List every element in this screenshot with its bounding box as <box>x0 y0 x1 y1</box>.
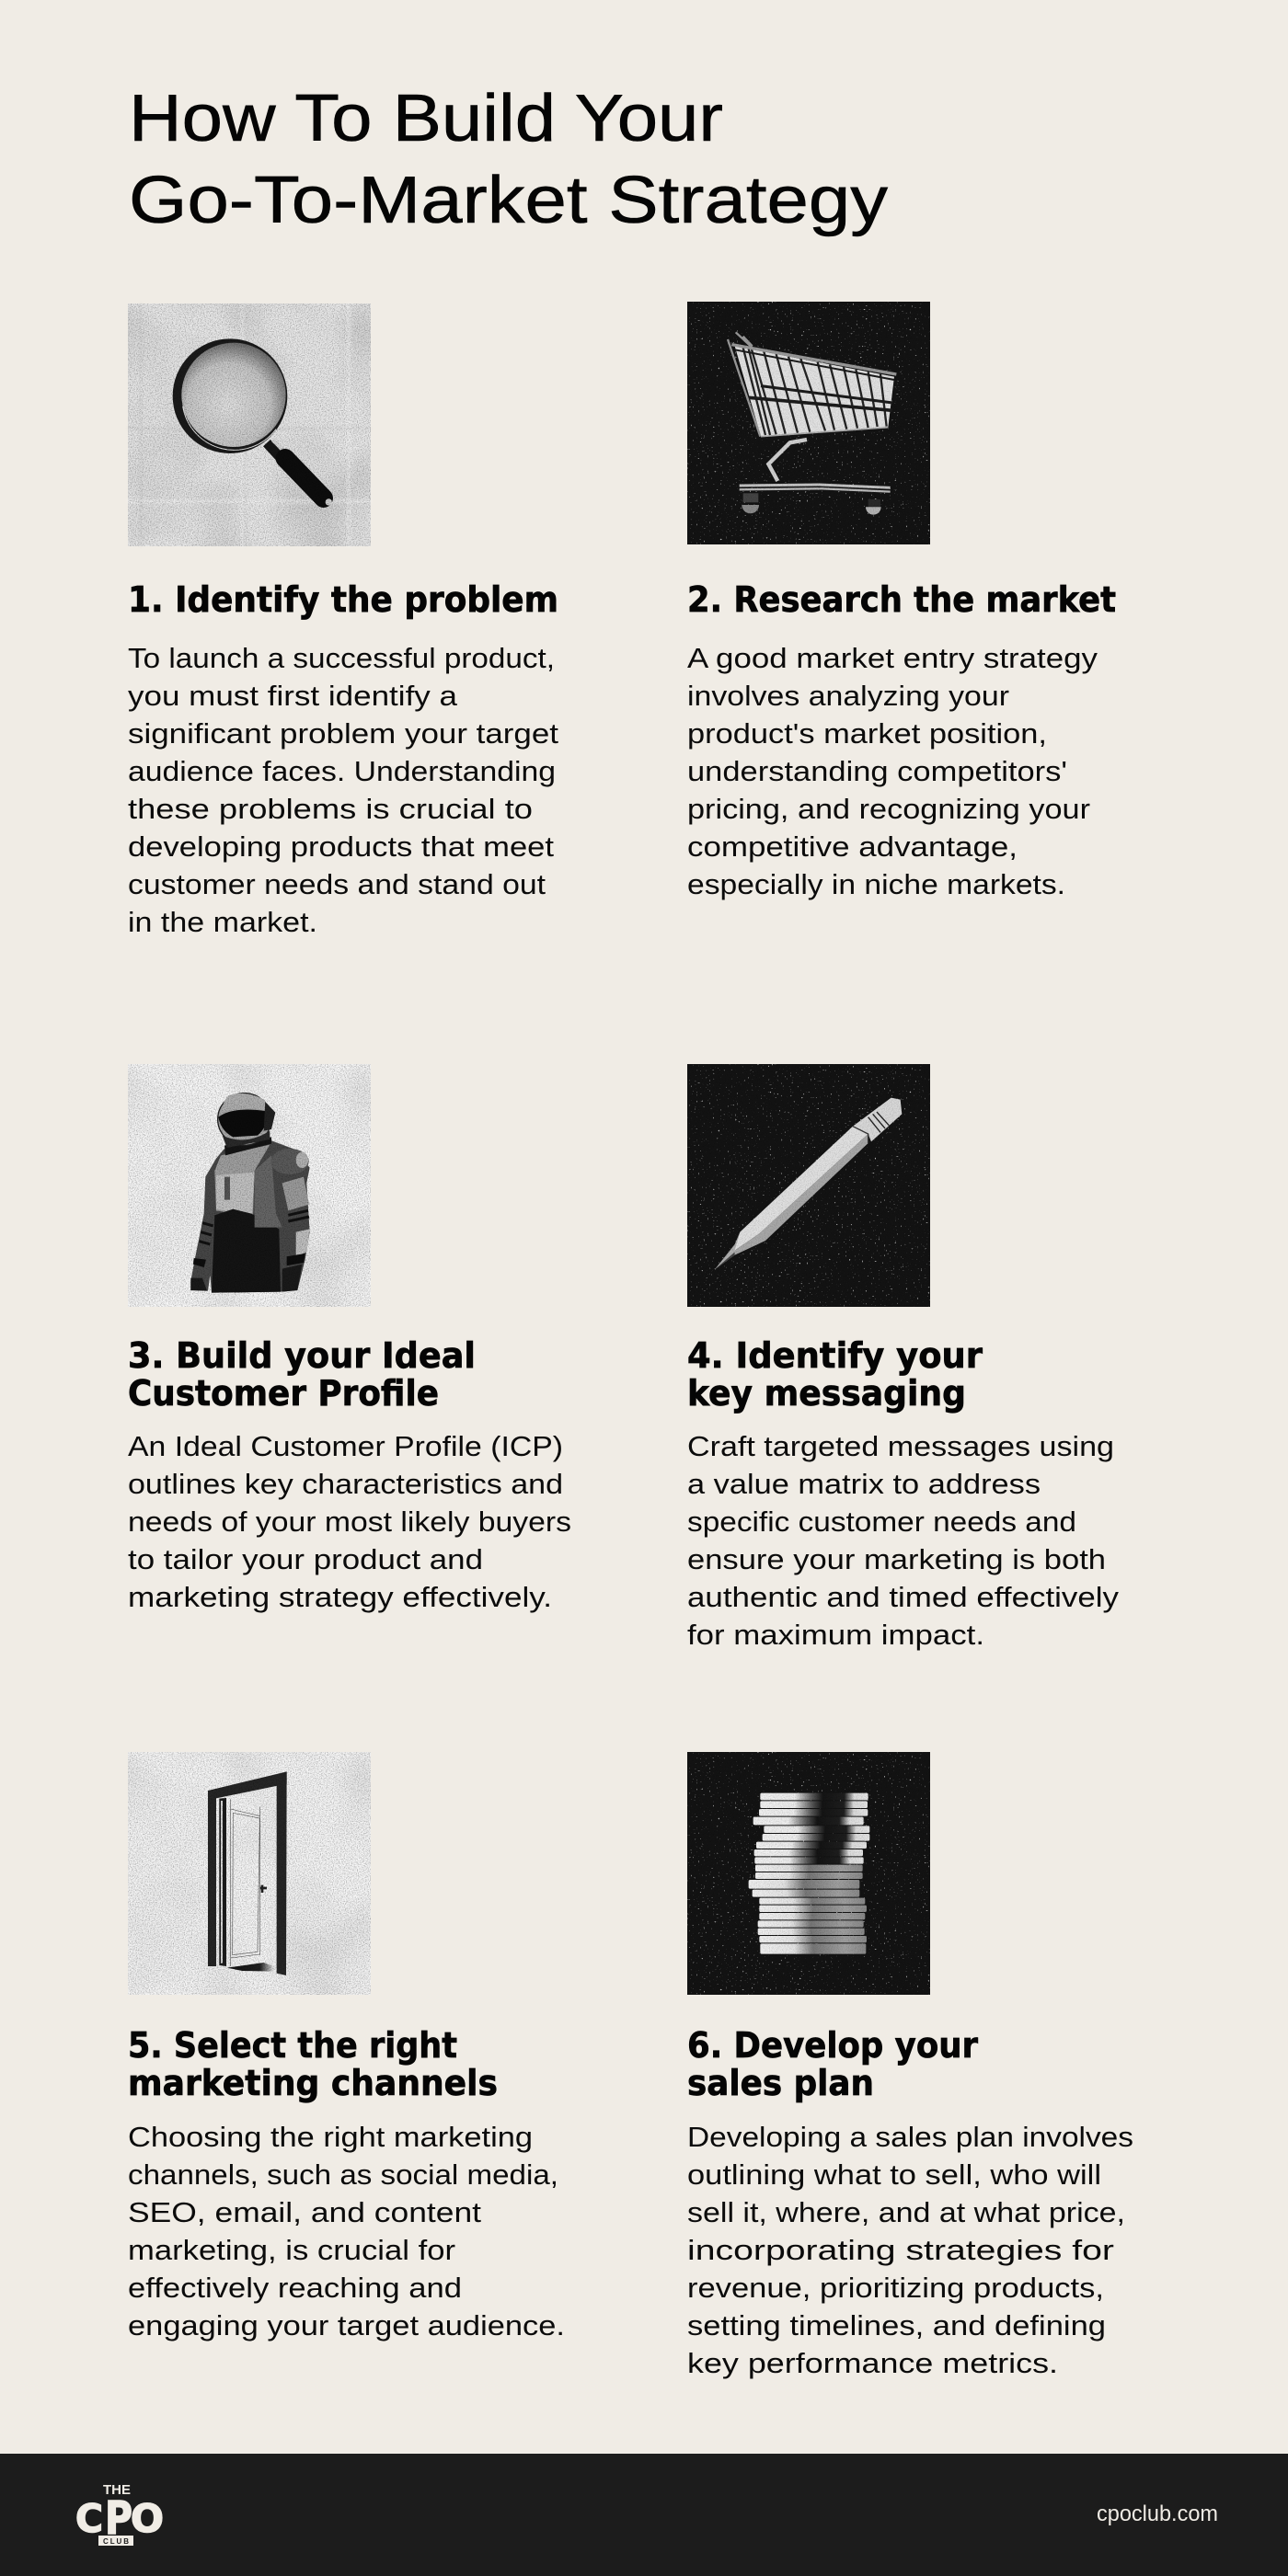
body text: product's market position, <box>687 717 1047 750</box>
website url: cpoclub.com <box>1097 2502 1218 2526</box>
heading: 6. Develop your <box>687 2025 978 2066</box>
title <box>129 82 888 237</box>
heading: sales plan <box>687 2063 874 2103</box>
body text: setting timelines, and defining <box>687 2309 1106 2341</box>
body text: customer needs and stand out <box>128 868 546 900</box>
body text: Craft targeted messages using <box>687 1430 1114 1462</box>
heading <box>128 2025 498 2103</box>
icon: open door on paper <box>128 1752 371 1995</box>
title: Go-To-Market Strategy <box>129 164 888 237</box>
heading: Customer Profile <box>128 1373 439 1414</box>
body text <box>687 642 1098 900</box>
heading: 3. Build your Ideal <box>128 1335 476 1376</box>
body text: audience faces. Understanding <box>128 755 556 787</box>
body text: specific customer needs and <box>687 1506 1076 1538</box>
body text: channels, such as social media, <box>128 2158 558 2191</box>
body text: engaging your target audience. <box>128 2309 565 2341</box>
body text: needs of your most likely buyers <box>128 1506 571 1538</box>
icon: pencil on black <box>687 1064 930 1307</box>
heading: key messaging <box>687 1373 966 1414</box>
logo: the cpo club: P <box>105 2492 132 2545</box>
body text <box>128 1430 571 1613</box>
title: How To Build Your <box>129 82 723 155</box>
logo: the cpo club: CLUB <box>103 2537 129 2546</box>
body text: authentic and timed effectively <box>687 1581 1120 1613</box>
icon: astronaut on paper <box>128 1064 371 1307</box>
heading <box>687 2025 978 2103</box>
body text: sell it, where, and at what price, <box>687 2196 1125 2228</box>
body text: marketing strategy effectively. <box>128 1581 552 1613</box>
body text: developing products that meet <box>128 830 554 863</box>
heading: 2. Research the market <box>687 579 1116 620</box>
body text: A good market entry strategy <box>687 642 1098 674</box>
body text <box>687 2121 1133 2379</box>
body text: you must first identify a <box>128 680 458 712</box>
logo: the cpo club: C <box>75 2496 103 2541</box>
panel: step 4 identify your key messaging <box>687 1064 1120 1651</box>
body text: involves analyzing your <box>687 680 1009 712</box>
heading: 4. Identify your <box>687 1335 983 1376</box>
body text: incorporating strategies for <box>687 2234 1114 2266</box>
heading <box>128 1335 476 1414</box>
body text: marketing, is crucial for <box>128 2234 455 2266</box>
panel: step 6 develop your sales plan <box>687 1752 1133 2379</box>
body text <box>128 2121 565 2341</box>
logo: the cpo club <box>75 2482 164 2546</box>
body text: to tailor your product and <box>128 1543 483 1575</box>
body text: effectively reaching and <box>128 2272 462 2304</box>
icon: shopping cart on black <box>687 302 930 544</box>
logo: the cpo club: THE <box>103 2482 131 2498</box>
heading: 5. Select the right <box>128 2025 457 2066</box>
panel: step 5 select the right marketing channels <box>128 1752 565 2341</box>
body text: competitive advantage, <box>687 830 1018 863</box>
body text: understanding competitors' <box>687 755 1067 787</box>
panel: step 1 identify the problem <box>128 303 558 938</box>
body text: Developing a sales plan involves <box>687 2121 1133 2153</box>
icon: magnifying glass on paper <box>128 303 371 546</box>
panel: step 2 research the market <box>687 302 1116 900</box>
body text: in the market. <box>128 906 317 938</box>
body text: especially in niche markets. <box>687 868 1065 900</box>
body text: significant problem your target <box>128 717 558 750</box>
body text: these problems is crucial to <box>128 793 533 825</box>
body text: Choosing the right marketing <box>128 2121 533 2153</box>
icon: stack of coins on black <box>687 1752 930 1995</box>
body text: ensure your marketing is both <box>687 1543 1106 1575</box>
body text: a value matrix to address <box>687 1468 1041 1500</box>
heading: 1. Identify the problem <box>128 579 558 620</box>
footer bar <box>0 2454 1288 2576</box>
logo: the cpo club: O <box>131 2496 164 2541</box>
heading: marketing channels <box>128 2063 498 2103</box>
body text: key performance metrics. <box>687 2347 1058 2379</box>
body text: for maximum impact. <box>687 1619 984 1651</box>
body text: outlines key characteristics and <box>128 1468 563 1500</box>
body text: revenue, prioritizing products, <box>687 2272 1104 2304</box>
body text: SEO, email, and content <box>128 2196 481 2228</box>
body text <box>687 1430 1120 1651</box>
heading <box>687 1335 983 1414</box>
body text: outlining what to sell, who will <box>687 2158 1101 2191</box>
body text: pricing, and recognizing your <box>687 793 1090 825</box>
body text: To launch a successful product, <box>128 642 555 674</box>
body text <box>128 642 558 938</box>
panel: step 3 build your ideal customer profile <box>128 1064 571 1613</box>
body text: An Ideal Customer Profile (ICP) <box>128 1430 563 1462</box>
